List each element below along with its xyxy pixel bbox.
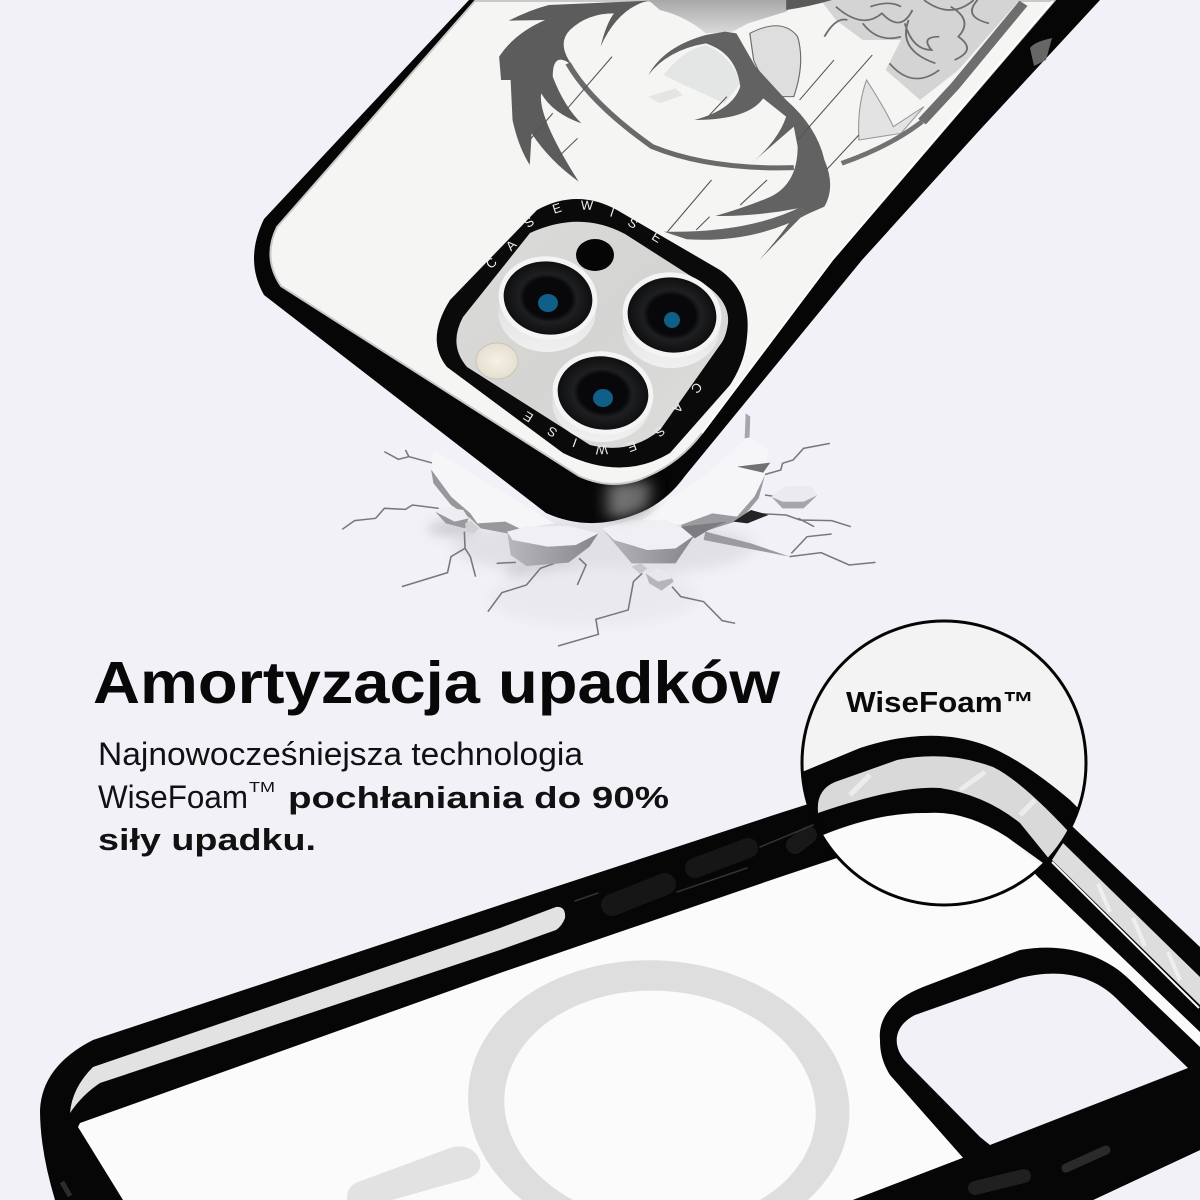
magsafe ring xyxy=(468,960,849,1200)
flash xyxy=(476,343,518,379)
magnifier callout xyxy=(802,621,1086,905)
lens two xyxy=(620,269,724,368)
foam strip left xyxy=(70,907,565,1113)
rose and hair xyxy=(821,0,1020,100)
bottom corner highlight xyxy=(598,480,660,518)
lower phone case, inside view xyxy=(40,772,1200,1200)
crack lines xyxy=(342,443,875,646)
impact shadow xyxy=(428,517,754,627)
side button xyxy=(1030,38,1052,66)
rock slabs xyxy=(431,413,818,591)
charging port xyxy=(1066,1150,1106,1168)
bottom button xyxy=(975,1176,1024,1188)
magnified foam view xyxy=(804,736,1078,872)
body text: Najnowocześniejsza technologia xyxy=(98,736,583,772)
lens one xyxy=(496,253,600,352)
case frame xyxy=(40,772,1200,1200)
rain scratches xyxy=(530,55,872,232)
cracked ground impact xyxy=(342,413,875,646)
camera cut-out frame xyxy=(880,948,1200,1160)
body text: TM xyxy=(249,779,275,796)
right antler xyxy=(648,32,830,260)
lens three xyxy=(550,348,656,442)
camera hole xyxy=(576,239,614,271)
ring brand top: CASEWISE xyxy=(483,198,665,272)
left antler xyxy=(499,1,648,182)
camera opening xyxy=(897,974,1188,1145)
upper phone case with camera xyxy=(254,0,1100,523)
magsafe bar xyxy=(347,1146,480,1200)
magnifier outline xyxy=(802,621,1086,905)
camera plate xyxy=(456,222,728,448)
body text: pochłaniania do 90% xyxy=(288,780,669,815)
body text: WiseFoam xyxy=(98,779,248,815)
right edge highlight xyxy=(702,1,1053,433)
side buttons xyxy=(575,825,813,905)
clear back panel xyxy=(78,828,1200,1200)
back panel xyxy=(270,1,1054,484)
moon patch xyxy=(648,45,740,103)
WiseFoam label: WiseFoam™ xyxy=(846,687,1034,719)
body text: siły upadku. xyxy=(98,822,316,857)
camera ring xyxy=(437,198,748,467)
moon circle arc xyxy=(568,63,794,168)
case body xyxy=(254,0,1100,523)
ear xyxy=(750,26,801,97)
deer sketch artwork xyxy=(499,0,1023,260)
ring brand bottom: CASEWISE xyxy=(520,380,705,458)
foam strip right xyxy=(1052,843,1200,1005)
bottom edge band xyxy=(853,1067,1200,1200)
deer head xyxy=(648,0,798,33)
heading: Amortyzacja upadków xyxy=(93,650,780,716)
body text xyxy=(98,736,669,857)
corner hole xyxy=(62,1182,70,1196)
